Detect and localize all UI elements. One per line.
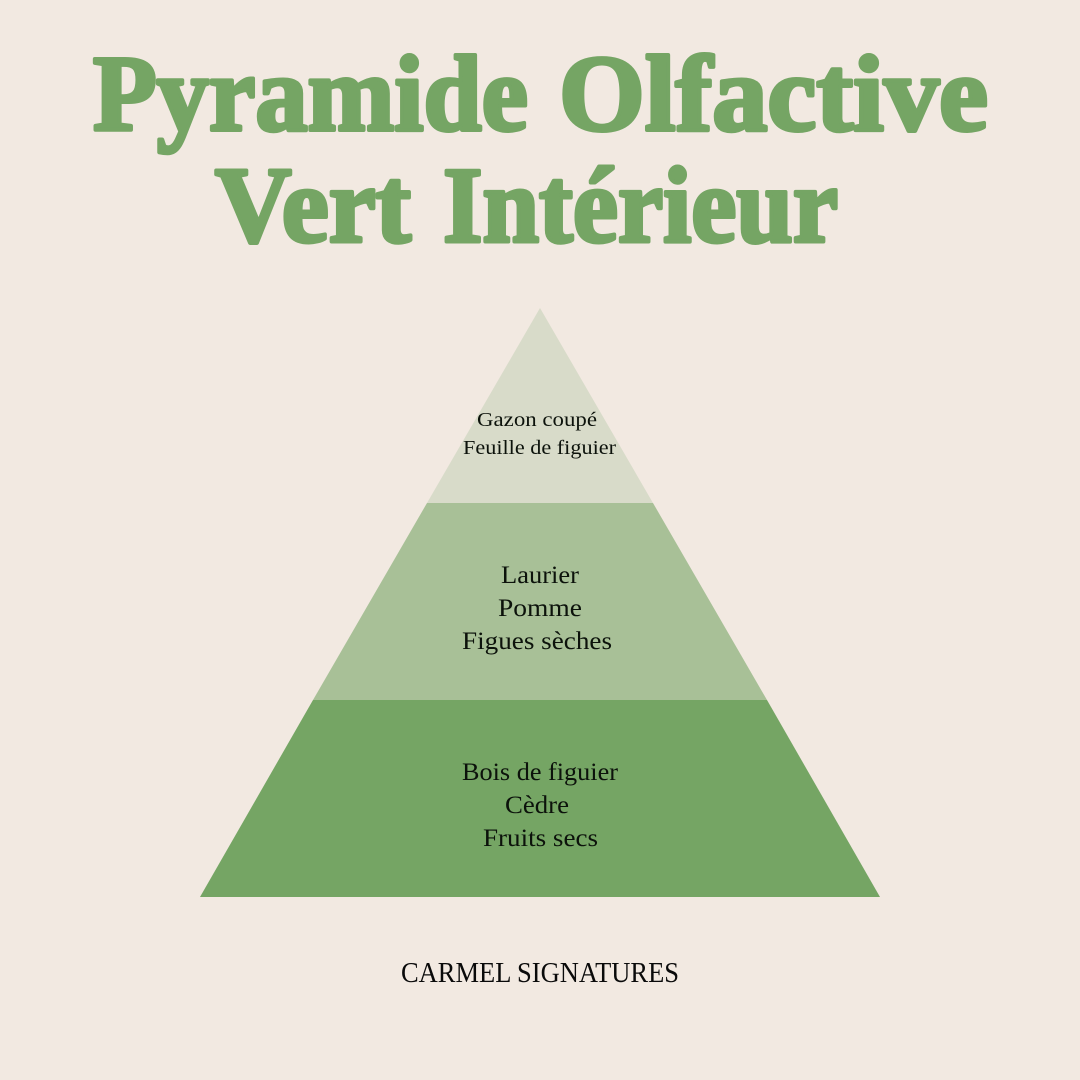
- pyramid chart: [200, 308, 880, 897]
- title: Intérieur: [443, 146, 838, 266]
- text: base notes: Cèdre: [505, 792, 569, 819]
- text: top notes: Gazon coupé: [477, 409, 597, 431]
- pyramid tier: top notes: [427, 308, 653, 503]
- title: Pyramide: [93, 35, 528, 154]
- pyramid tier: base notes: [200, 700, 880, 897]
- title: Olfactive: [559, 35, 988, 154]
- title: Vert: [215, 146, 411, 266]
- text: heart notes: Figues sèches: [462, 628, 612, 655]
- pyramid tier: heart notes: [313, 503, 767, 700]
- text: heart notes: Laurier: [501, 562, 580, 589]
- text: base notes: Bois de figuier: [462, 759, 619, 786]
- text: heart notes: [462, 562, 612, 655]
- text: heart notes: Pomme: [498, 595, 582, 622]
- text: top notes: [463, 409, 616, 459]
- brand footer: CARMEL SIGNATURES: [401, 958, 679, 989]
- text: base notes: [462, 759, 619, 852]
- text: base notes: Fruits secs: [483, 825, 598, 852]
- text: top notes: Feuille de figuier: [463, 437, 616, 459]
- title: [92, 35, 988, 266]
